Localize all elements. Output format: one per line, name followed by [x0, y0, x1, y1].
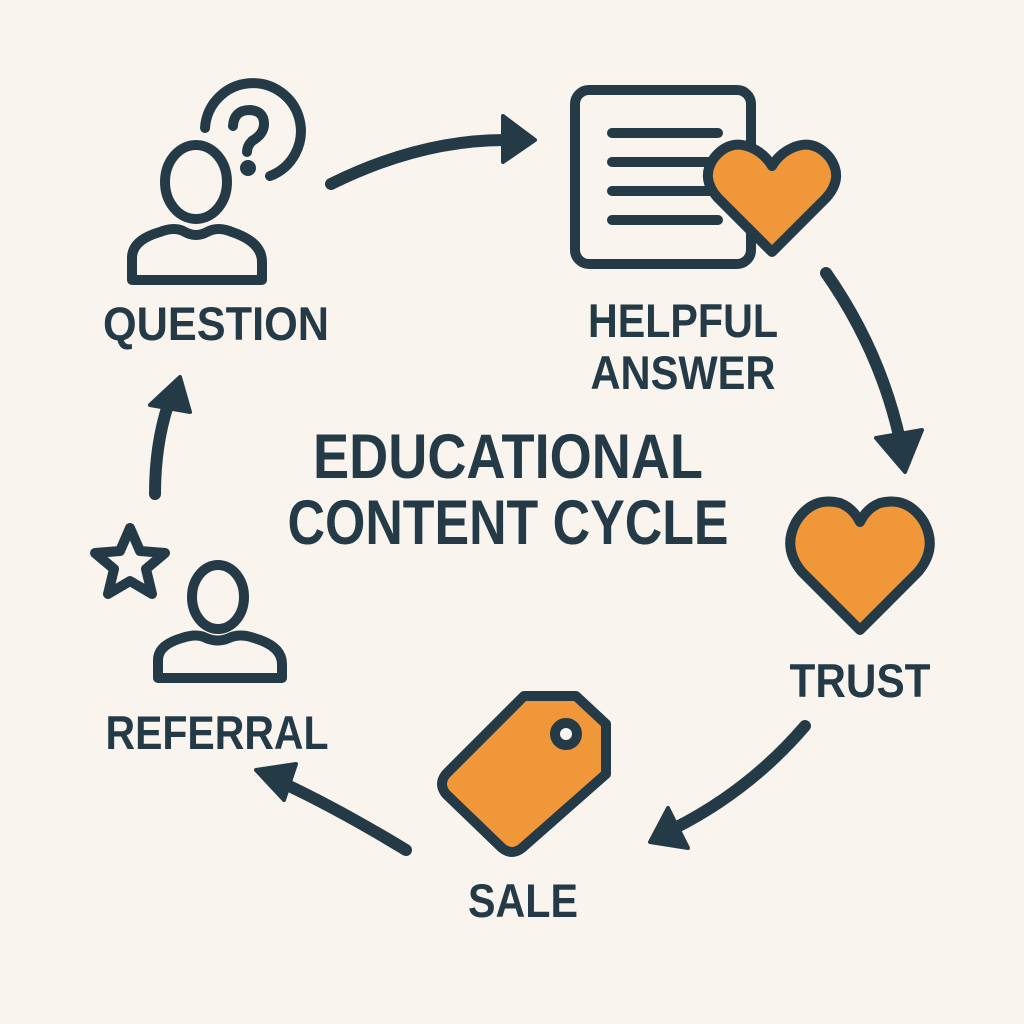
arrow: sale to referral — [256, 764, 406, 850]
arrow: answer to trust — [826, 273, 922, 472]
label: REFERRAL: REFERRAL — [106, 706, 328, 759]
label: SALE: SALE — [468, 874, 578, 927]
arrow: question to answer — [331, 116, 535, 184]
label: HELPFUL ANSWER: ANSWER — [590, 346, 776, 399]
icon: price tag — [442, 696, 606, 852]
label: HELPFUL ANSWER — [588, 294, 778, 399]
arrow: referral to question — [150, 377, 190, 494]
icon: person with question — [132, 83, 301, 280]
title: EDUCATIONAL — [313, 422, 703, 492]
icon: person with star — [95, 528, 282, 678]
icon: document with heart — [575, 90, 836, 264]
label: HELPFUL ANSWER: HELPFUL — [588, 294, 778, 347]
arrow: trust to sale — [650, 726, 805, 848]
label: TRUST: TRUST — [790, 654, 931, 707]
title: CONTENT CYCLE — [288, 488, 728, 558]
icon: heart trust — [790, 502, 930, 630]
title — [288, 422, 728, 558]
label: QUESTION: QUESTION — [103, 297, 329, 350]
